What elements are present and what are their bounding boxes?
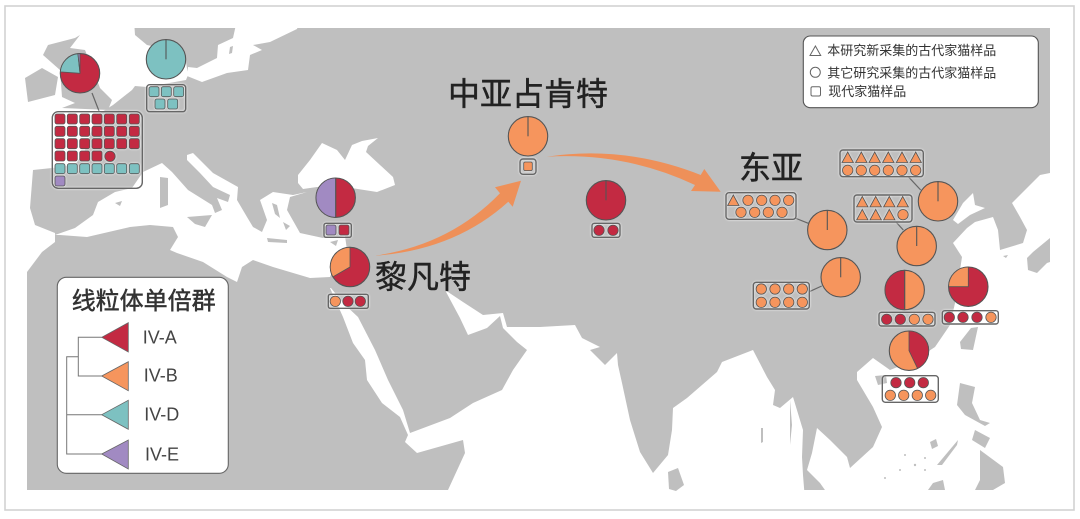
heading: Levant: 黎凡特	[375, 259, 471, 295]
legend text: modern cats: 现代家猫样品	[828, 84, 906, 99]
pie: Anatolia	[316, 178, 355, 217]
clade IV-A	[102, 323, 177, 352]
legend triangle icon	[810, 46, 821, 56]
pie: South China	[889, 331, 929, 370]
pie: Central Asia Djankent	[508, 117, 548, 156]
legend circle icon	[810, 67, 820, 77]
clade IV-E: IV-E	[145, 444, 179, 464]
heading: Central Asia Djankent: 中亚占肯特	[448, 76, 608, 112]
connector: North China south	[896, 222, 903, 230]
sample box: Central China	[879, 312, 935, 326]
legend: mitochondrial haplogroups	[57, 277, 228, 473]
pie: North China east	[918, 182, 958, 221]
connector: East Asia west A	[795, 218, 808, 223]
clade IV-B: IV-B	[144, 366, 178, 386]
clade IV-D: IV-D	[144, 404, 179, 424]
clade IV-B	[102, 362, 178, 391]
pie: Central Asia red	[586, 181, 626, 220]
pie: Central China half	[885, 270, 924, 310]
legend text: newly collected: 本研究新采集的古代家猫样品	[827, 43, 996, 58]
clade IV-E	[102, 440, 179, 469]
pie: East China three quarters	[949, 267, 988, 306]
sample box: North China east	[840, 150, 923, 177]
pie: East Asia west A	[808, 210, 847, 250]
tree	[67, 337, 102, 454]
sample box: Anatolia	[324, 223, 351, 237]
sample box: North China south	[854, 195, 912, 222]
pie: Britain	[60, 54, 100, 93]
arrow: Levant to Central Asia	[375, 181, 521, 256]
legend: sample types	[803, 36, 1038, 108]
pie: Levant	[330, 247, 370, 287]
sample box: Levant	[328, 294, 368, 308]
connector: North China east	[908, 177, 921, 190]
arrow: Central Asia to East Asia	[547, 153, 721, 192]
clade IV-D	[102, 400, 179, 429]
legend text: other studies: 其它研究采集的古代家猫样品	[827, 66, 996, 80]
sample box: East China	[942, 311, 998, 324]
legend title: 线粒体单倍群	[72, 288, 216, 315]
legend square icon	[811, 87, 820, 96]
connector: Britain pie to sample box	[92, 93, 99, 111]
pie: East Asia west B	[821, 258, 860, 297]
sample box: Britain	[52, 112, 142, 188]
sample box: South China	[882, 376, 938, 402]
pie: North China south	[897, 226, 936, 266]
sample box: North Sea region	[147, 85, 186, 112]
pie: North Sea region teal	[146, 40, 186, 79]
sample box: Central Asia red	[592, 223, 620, 237]
connector: East Asia west B	[809, 286, 822, 292]
sample box: Djankent	[520, 159, 536, 174]
clade IV-A: IV-A	[143, 328, 177, 348]
sample box: East Asia west B	[753, 282, 809, 309]
heading: East Asia: 东亚	[739, 150, 803, 186]
sample box: East Asia west A	[726, 193, 796, 219]
